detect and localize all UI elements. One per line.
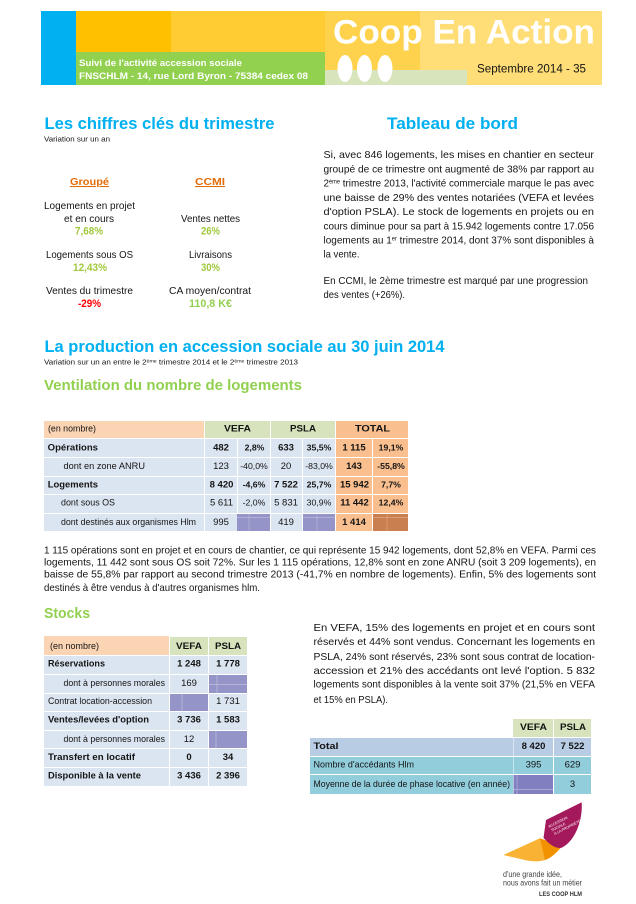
icon: logo shape: ACCESSION	[548, 816, 569, 829]
heading: la production	[44, 337, 445, 367]
text block: stocks commentary: logements sont disponibles à la vente soit 37% (21,5% en VEFA	[314, 679, 595, 691]
text block: tableau de bord: En CCMI, le 2ème trimestre est marqué par une progression	[324, 275, 588, 287]
table: stocks: 3 736	[177, 715, 201, 726]
heading: tableau de bord: Tableau de bord	[387, 114, 518, 133]
table: ventilation du nombre de logements: 1 115	[342, 443, 366, 454]
table: stocks: 169	[181, 678, 197, 689]
table: ventilation du nombre de logements: 15 942	[340, 480, 369, 491]
text block: stocks commentary: accession et 21% des accédants ont levé l'option. 5 832	[314, 665, 595, 677]
text block: production commentary	[44, 544, 596, 594]
table: ventilation du nombre de logements: PSLA	[290, 424, 316, 435]
table: ventilation du nombre de logements: -4,6%	[243, 480, 266, 490]
table: accédants: VEFA	[520, 722, 547, 733]
table: stocks: 2 396	[216, 771, 240, 782]
table: accédants: 629	[565, 760, 580, 771]
heading: la production: Variation sur un an entre le 2	[44, 360, 133, 367]
table: ventilation du nombre de logements: 30,9%	[307, 498, 332, 508]
column: CCMI: Livraisons	[189, 249, 232, 261]
column: Groupé: Logements en projet	[44, 200, 135, 212]
text block: production commentary: 1 115 opérations sont en projet et en cours de chantier, ce qui représente 15 942 logements, dont 52,8% en VEFA. Parmi ces	[44, 544, 596, 556]
table: ventilation du nombre de logements: TOTAL	[355, 424, 390, 435]
table: ventilation du nombre de logements: 8 420	[210, 480, 233, 491]
table: accédants: 7 522	[561, 741, 584, 752]
table: stocks: Réservations	[48, 659, 105, 670]
text block: stocks commentary: En VEFA, 15% des logements en projet et en cours sont	[314, 622, 595, 634]
column: Groupé: Logements sous OS	[46, 249, 133, 261]
table: ventilation du nombre de logements: 419	[278, 517, 294, 528]
table: stocks: dont à personnes morales	[64, 678, 165, 689]
column: CCMI: Ventes nettes	[181, 213, 240, 225]
text block: tableau de bord	[324, 149, 595, 301]
text block: tableau de bord: des ventes (+26%).	[324, 289, 405, 301]
banner subtitle: FNSCHLM - 14, rue Lord Byron - 75384 cedex 08	[79, 71, 308, 82]
table: stocks: VEFA	[176, 641, 202, 652]
table: ventilation du nombre de logements: dont destinés aux organismes Hlm	[61, 517, 196, 528]
text block: tableau de bord: d'option PSLA). Le stock de logements en projets ou en	[324, 206, 594, 218]
icon: logo shape	[503, 802, 582, 861]
column: CCMI	[169, 176, 251, 310]
table: stocks	[44, 636, 247, 786]
table: stocks: Transfert en locatif	[48, 752, 136, 763]
table: stocks: Ventes/levées d'option	[48, 715, 149, 726]
logo name: LES COOP HLM	[539, 892, 582, 898]
table: accédants	[310, 719, 591, 794]
heading: les chiffres clés: Les chiffres clés du trimestre	[44, 114, 274, 133]
table: stocks: 1 778	[216, 659, 240, 670]
banner title: Coop En Action	[333, 14, 595, 52]
table: stocks: 1 248	[177, 659, 201, 670]
table: ventilation du nombre de logements: 7 522	[274, 480, 298, 491]
column: CCMI: 30%	[201, 262, 220, 274]
table: accédants: PSLA	[560, 722, 586, 733]
text block: tableau de bord: 2	[324, 178, 329, 190]
logo: Les Coop HLM	[503, 802, 582, 898]
column: CCMI: CA moyen/contrat	[169, 285, 251, 297]
table: ventilation du nombre de logements: 5 611	[210, 498, 233, 509]
logo tagline	[503, 870, 582, 888]
table: ventilation du nombre de logements: dont sous OS	[61, 498, 115, 509]
table: ventilation du nombre de logements: -83,0%	[305, 461, 333, 471]
heading: stocks: Stocks	[44, 605, 90, 622]
table: stocks: 3 436	[177, 771, 201, 782]
table: ventilation du nombre de logements: Opérations	[48, 443, 98, 454]
table: ventilation du nombre de logements: 35,5%	[307, 443, 332, 453]
text block: tableau de bord: groupé de ce trimestre ont augmenté de 38% par rapport au	[324, 164, 594, 176]
table: ventilation du nombre de logements: 633	[278, 443, 294, 454]
column: CCMI: CCMI	[195, 176, 225, 188]
table: ventilation du nombre de logements: 20	[281, 461, 291, 472]
heading: les chiffres clés	[44, 114, 274, 144]
table: ventilation du nombre de logements: 995	[213, 517, 229, 528]
table: ventilation du nombre de logements: dont en zone ANRU	[64, 461, 145, 472]
table: stocks: (en nombre)	[50, 641, 99, 652]
table: ventilation du nombre de logements: -55,8%	[377, 461, 405, 471]
table: stocks: 12	[184, 734, 194, 745]
table: ventilation du nombre de logements: (en nombre)	[48, 424, 96, 435]
table: stocks: Disponible à la vente	[48, 771, 141, 782]
column: Groupé: Groupé	[70, 176, 109, 188]
banner subtitle	[79, 58, 308, 82]
table: stocks: 1 583	[216, 715, 240, 726]
table: ventilation du nombre de logements: VEFA	[224, 424, 251, 435]
table: accédants: Moyenne de la durée de phase locative (en année)	[314, 779, 510, 790]
table: stocks: 34	[223, 752, 234, 763]
column: CCMI: 110,8 K€	[189, 298, 232, 310]
column: Groupé: -29%	[78, 298, 101, 310]
table: accédants: Total	[314, 741, 338, 752]
text block: tableau de bord: la vente.	[324, 248, 360, 260]
heading: ventilation: Ventilation du nombre de logements	[44, 377, 302, 394]
table: ventilation du nombre de logements: Logements	[48, 480, 98, 491]
table: ventilation du nombre de logements: 11 442	[340, 498, 369, 509]
table: ventilation du nombre de logements: 482	[213, 443, 229, 454]
logo tagline: nous avons fait un métier	[503, 878, 582, 888]
text block: tableau de bord: cours diminue pour sa part à 15.942 logements contre 17.056	[324, 220, 594, 232]
text block: production commentary: destinés à être vendus à d'autres organismes hlm.	[44, 582, 260, 594]
table: ventilation du nombre de logements: 5 831	[274, 498, 298, 509]
text block: tableau de bord: Si, avec 846 logements, les mises en chantier en secteur	[324, 149, 595, 161]
text block: tableau de bord: une baisse de 29% des ventes notariées (VEFA et levées	[324, 192, 594, 204]
heading: les chiffres clés: Variation sur un an	[44, 136, 110, 144]
header banner	[41, 11, 602, 85]
table: ventilation du nombre de logements: 19,1%	[379, 443, 404, 453]
table: stocks: PSLA	[215, 641, 241, 652]
icon: logo shape: SOCIALE	[551, 822, 567, 832]
text block: stocks commentary	[314, 622, 595, 706]
column: Groupé: et en cours	[64, 213, 114, 225]
table: ventilation du nombre de logements: -2,0%	[243, 498, 266, 508]
text block: production commentary: baisse de 55,8% par rapport au second trimestre 2013 (-41,7% en nombre de logements). Enfin, 5% des logements sont	[44, 569, 596, 581]
heading: la production: ème	[234, 359, 245, 364]
heading: la production: La production en accession sociale au 30 juin 2014	[44, 337, 445, 356]
icon: logo shape: À LA PROPRIÉTÉ	[553, 818, 582, 836]
table: stocks: 0	[186, 752, 192, 763]
text block: tableau de bord: logements au 1	[324, 234, 395, 246]
text block: stocks commentary: PSLA, 24% sont réservés, 23% sont sous contrat de location-	[314, 651, 595, 663]
column: Groupé	[44, 176, 135, 310]
table: ventilation du nombre de logements: 2,8%	[245, 443, 265, 453]
table: ventilation du nombre de logements	[44, 421, 408, 531]
text block: tableau de bord: trimestre 2014, dont 37% sont disponibles à	[397, 234, 594, 246]
text block: production commentary: logements, 11 442 sont sous OS soit 72%. Sur les 1 115 opérations, 12,8% sont en zone ANRU (soit 3 209 logements), en	[44, 557, 596, 569]
banner subtitle: Suivi de l'activité accession sociale	[79, 58, 242, 69]
table: accédants: 395	[526, 760, 541, 771]
panel: key figures	[44, 176, 251, 310]
table: ventilation du nombre de logements: 12,4%	[379, 498, 404, 508]
text block: tableau de bord: er	[392, 236, 397, 242]
column: CCMI: 26%	[201, 226, 220, 238]
logo tagline: d'une grande idée,	[503, 870, 562, 879]
table: ventilation du nombre de logements: 25,7%	[307, 480, 332, 490]
icon: three white ovals	[338, 55, 392, 82]
table: ventilation du nombre de logements: 1 414	[342, 517, 367, 528]
table: accédants: 8 420	[522, 741, 545, 752]
table: ventilation du nombre de logements: 123	[213, 461, 229, 472]
column: Groupé: 12,43%	[73, 262, 107, 274]
table: ventilation du nombre de logements: -40,0%	[240, 461, 268, 471]
text block: stocks commentary: et 15% en PSLA).	[314, 694, 388, 706]
table: accédants: Nombre d'accédants Hlm	[314, 760, 414, 771]
heading: la production: trimestre 2014 et le 2	[157, 360, 234, 367]
issue date: Septembre 2014 - 35	[477, 64, 586, 76]
table: stocks: 1 731	[216, 696, 240, 707]
column: Groupé: Ventes du trimestre	[46, 285, 133, 297]
table: accédants: 3	[570, 779, 575, 790]
heading: la production: trimestre 2013	[244, 360, 298, 367]
table: ventilation du nombre de logements: 7,7%	[381, 480, 401, 490]
table: ventilation du nombre de logements: 143	[346, 461, 362, 472]
column: Groupé: 7,68%	[75, 226, 103, 238]
text block: tableau de bord: trimestre 2013, l'activité commerciale marque le pas avec	[340, 178, 594, 190]
text block: stocks commentary: réservés et 44% sont vendus. Concernant les logements en	[314, 636, 595, 648]
table: stocks: Contrat location-accession	[48, 696, 152, 707]
heading: la production: ème	[147, 359, 157, 364]
table: stocks: dont à personnes morales	[64, 734, 165, 745]
text block: tableau de bord: ème	[329, 180, 341, 186]
